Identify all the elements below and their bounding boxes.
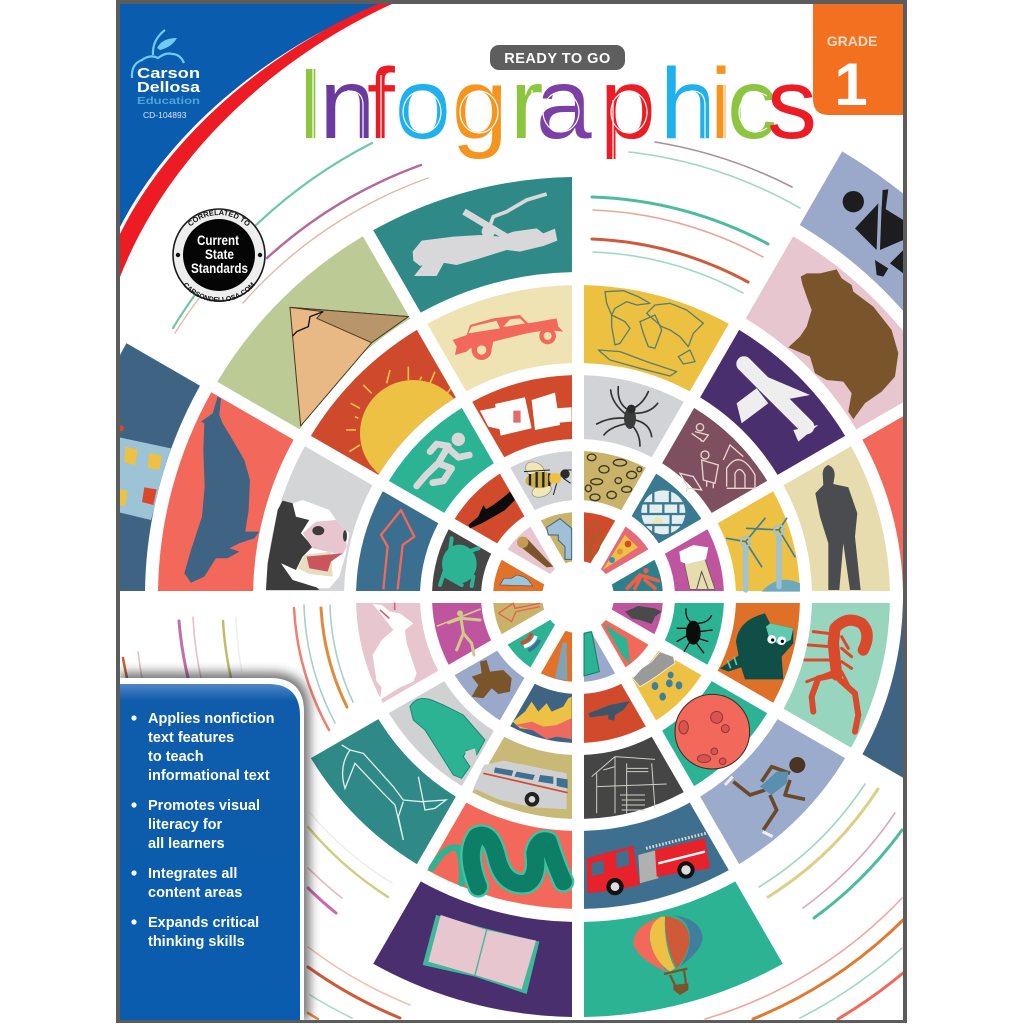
tile: yeti xyxy=(375,665,503,786)
features panel xyxy=(120,672,310,1020)
tile: bear xyxy=(725,236,965,453)
tile: scorpion xyxy=(784,603,890,748)
tile: car xyxy=(427,252,606,416)
features panel: content areas xyxy=(148,885,242,901)
tile: abstract black figure xyxy=(800,152,903,311)
title: I xyxy=(297,48,324,160)
publisher logo: Carson xyxy=(137,66,200,82)
title: a xyxy=(536,48,592,160)
tile: whale xyxy=(158,392,294,591)
tile: rain cloud xyxy=(619,646,701,729)
tile: tooth xyxy=(656,529,738,612)
tile: open book xyxy=(373,881,572,1017)
tile: rabbit xyxy=(333,575,454,703)
features panel: thinking skills xyxy=(148,934,245,950)
features panel: all learners xyxy=(148,836,225,852)
title: o xyxy=(395,48,451,160)
tile: running figure xyxy=(389,394,510,522)
tile: wind turbines xyxy=(702,491,823,619)
tile: bat xyxy=(455,465,537,548)
tile: person on teal xyxy=(610,560,670,612)
tile: hot air balloon xyxy=(543,846,783,1024)
standards seal: State xyxy=(205,246,234,262)
tile: runner woman xyxy=(681,705,845,884)
title: i xyxy=(710,48,732,160)
blue corner band xyxy=(120,4,392,277)
tile: dark blue right xyxy=(862,603,998,802)
tile: tick xyxy=(665,603,724,665)
grade badge: 1 xyxy=(834,51,868,118)
tile: airplane xyxy=(686,330,865,494)
tile: children's drawing xyxy=(653,408,781,529)
title: h xyxy=(660,48,716,160)
publisher logo: Education xyxy=(137,96,200,107)
standards seal: CARSONDELLOSA.COM xyxy=(184,282,255,302)
features panel: Expands critical xyxy=(148,915,259,931)
title: s xyxy=(767,48,817,160)
tile: arrow on khaki xyxy=(486,582,546,634)
standards seal: Current xyxy=(197,232,239,248)
tile: bee xyxy=(510,437,593,519)
tile: pyramid xyxy=(217,210,434,450)
title: g xyxy=(452,48,508,160)
standards seal: Standards xyxy=(191,260,248,276)
features panel: literacy for xyxy=(148,817,222,833)
tile: leaf xyxy=(584,512,615,563)
tile: hawk xyxy=(563,675,646,757)
ready to go badge xyxy=(490,45,625,70)
tile: spider xyxy=(584,375,684,457)
ready to go badge: READY TO GO xyxy=(504,51,611,67)
title xyxy=(297,48,817,165)
features panel: Integrates all xyxy=(148,866,237,882)
tile: money xyxy=(563,629,615,689)
standards seal xyxy=(172,208,266,302)
features panel: Promotes visual xyxy=(148,798,260,814)
tile: scaffold building xyxy=(556,721,684,842)
tile: sun xyxy=(310,330,456,475)
tile: flag xyxy=(503,608,556,667)
standards seal: CORRELATED TO xyxy=(188,210,250,226)
tile: house xyxy=(541,505,593,565)
tile: log xyxy=(508,522,567,575)
tile: tower xyxy=(541,631,572,682)
tile: pizza xyxy=(600,527,653,586)
title: p xyxy=(600,48,656,160)
tile: coral right xyxy=(827,392,1024,632)
tile: seat belt xyxy=(472,352,600,473)
features panel: informational text xyxy=(148,768,270,784)
tile: pebbles xyxy=(584,451,646,510)
publisher logo xyxy=(132,30,201,120)
features panel: to teach xyxy=(148,749,204,765)
tile: rat xyxy=(612,603,663,634)
tile: red planet xyxy=(646,672,767,800)
tile: bus xyxy=(472,737,572,819)
tile: fire xyxy=(510,684,572,743)
features panel: Applies nonfiction xyxy=(148,711,274,727)
publisher logo: Dellosa xyxy=(137,80,201,96)
tile: cloud on orange xyxy=(493,560,544,591)
tile: squirrel xyxy=(446,638,529,720)
decorative arcs xyxy=(123,142,903,1019)
tile: deer xyxy=(291,700,470,864)
tile: man silhouette xyxy=(759,446,923,625)
tile: snake xyxy=(427,803,572,909)
grade badge: GRADE xyxy=(827,33,877,49)
tile: arrow xyxy=(356,491,438,591)
tile: fire truck xyxy=(550,778,729,942)
grade badge xyxy=(813,4,903,118)
tile: frog xyxy=(432,529,491,591)
tile: raccoon xyxy=(718,603,800,703)
tile: space station xyxy=(373,131,613,348)
tile: building xyxy=(120,343,200,591)
tile: abstract teal on coral xyxy=(589,619,648,672)
title: r xyxy=(510,48,543,160)
tile: igloo xyxy=(627,474,710,556)
tile: world map xyxy=(584,285,729,391)
features panel: text features xyxy=(148,730,234,746)
title: n xyxy=(320,48,375,160)
publisher logo: CD-104893 xyxy=(143,110,187,120)
tile: cow xyxy=(266,446,372,591)
title: c xyxy=(727,48,777,160)
tile: spear man xyxy=(418,582,500,665)
title: f xyxy=(367,48,395,160)
